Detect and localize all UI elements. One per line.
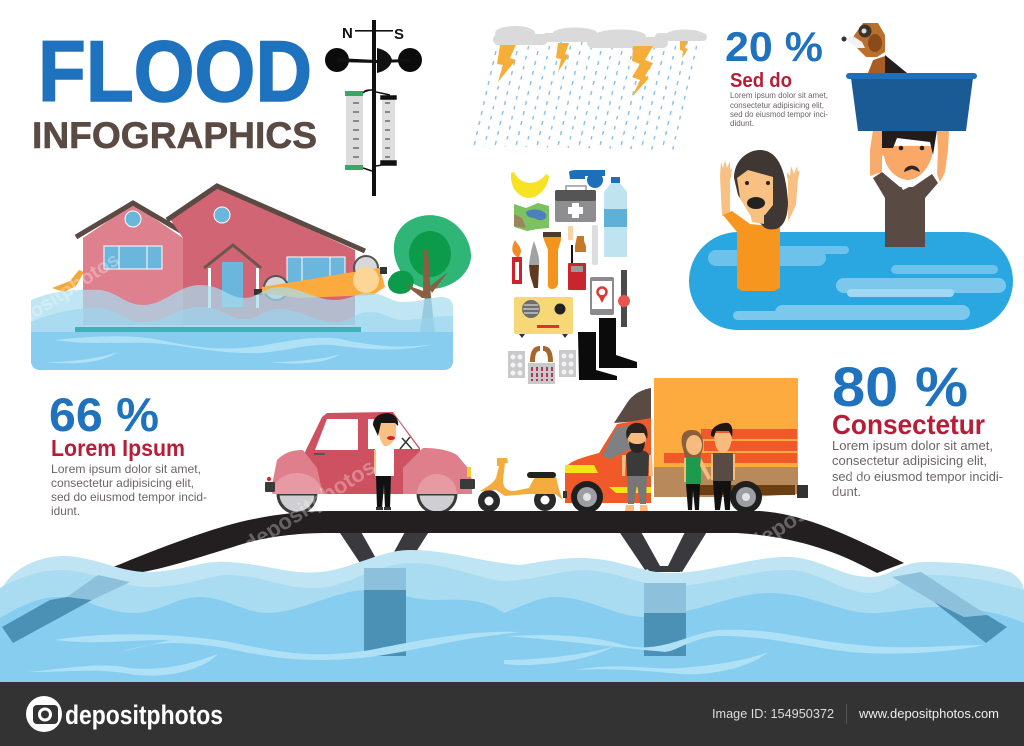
stat: 20 percent: 20 % xyxy=(725,23,823,70)
icon: phone xyxy=(590,277,614,315)
river middle layer xyxy=(0,563,1024,682)
title xyxy=(32,24,317,156)
icon: tree xyxy=(388,215,471,345)
stat: 66 percent: sed do eiusmod tempor incid- xyxy=(51,490,207,504)
logo wordmark: depositphotos xyxy=(65,700,223,730)
stat: 20 percent: sed do eiusmod tempor inci- xyxy=(730,109,828,119)
stat: 80 percent: 80 % xyxy=(832,355,968,418)
icon: pills xyxy=(508,346,576,384)
icon: medicine bottle xyxy=(575,236,586,252)
icon: knife xyxy=(529,241,539,288)
watermark text: depositphotos xyxy=(239,454,380,557)
stat: 20 percent: didunt. xyxy=(730,118,754,128)
icon: weather vane and rain gauge: S xyxy=(394,26,404,43)
title: INFOGRAPHICS xyxy=(32,115,317,156)
icon: walkie talkie xyxy=(568,245,586,290)
stat: 20 percent xyxy=(725,23,828,128)
icon: ampule xyxy=(568,226,573,240)
river lower layer xyxy=(0,590,1024,682)
panel: emergency kit items xyxy=(508,170,637,384)
icon: watch xyxy=(618,270,630,327)
icon: map xyxy=(514,203,549,231)
stat: 80 percent: Consectetur xyxy=(832,409,985,440)
stat: 20 percent: consectetur adipisicing elit, xyxy=(730,100,824,110)
river top layer xyxy=(0,550,1024,682)
icon: left house xyxy=(76,203,191,325)
icon: dog xyxy=(842,23,907,73)
icon: weather vane and rain gauge xyxy=(325,20,422,196)
panel: flooded house xyxy=(31,186,471,370)
stat: 20 percent: Sed do xyxy=(730,70,792,92)
panel: storm cloud and rain xyxy=(466,26,707,150)
stat: 66 percent: idunt. xyxy=(51,504,80,518)
river streaks xyxy=(28,630,985,676)
title: FLOOD xyxy=(38,24,312,120)
footer bar xyxy=(0,682,1024,746)
stat: 80 percent xyxy=(832,355,1003,499)
icon: truck xyxy=(563,378,808,513)
stat: 80 percent: sed do eiusmod tempor incidi- xyxy=(832,469,1003,484)
water: lower layer xyxy=(31,332,453,370)
icon: lighter xyxy=(512,240,522,284)
icon: woman in green xyxy=(682,430,711,510)
icon: camera logo xyxy=(26,696,62,732)
icon: floating car xyxy=(254,256,387,300)
icon: blue tub xyxy=(846,73,977,131)
icon: radio xyxy=(514,297,573,338)
panel: bridge and river xyxy=(0,511,1024,682)
stat: 66 percent: consectetur adipisicing elit, xyxy=(51,476,194,490)
stat: 66 percent: Lorem ipsum dolor sit amet, xyxy=(51,462,201,476)
icon: water bottle xyxy=(604,177,627,257)
stat: 20 percent: Lorem ipsum dolor sit amet, xyxy=(730,90,828,100)
stat: 66 percent xyxy=(49,388,207,518)
icon: weather vane and rain gauge: N xyxy=(342,25,353,42)
icon: flashlight xyxy=(543,232,561,289)
icon: woman in water xyxy=(720,150,800,291)
stat: 80 percent: consectetur adipisicing elit, xyxy=(832,453,987,468)
watermark text: depositphotos xyxy=(744,453,885,556)
icon: man carrying tub xyxy=(870,130,949,247)
stat: 66 percent: Lorem Ipsum xyxy=(51,435,185,461)
water: middle layer xyxy=(31,307,453,370)
icon: clouds xyxy=(493,26,707,48)
icon: submerged small creature xyxy=(52,270,84,292)
image id: Image ID: 154950372 xyxy=(712,707,834,721)
panel: people in flood water xyxy=(689,23,1013,330)
icon: lightning bolts xyxy=(497,41,688,97)
stat: 80 percent: Lorem ipsum dolor sit amet, xyxy=(832,438,993,453)
watermark text xyxy=(0,249,885,557)
submerged bridge upper parts xyxy=(67,568,987,617)
submerged bridge lower parts xyxy=(2,590,1007,656)
icon: man in grey xyxy=(711,423,735,510)
icon: whistle xyxy=(569,170,605,188)
bridge deck xyxy=(113,511,904,573)
water: top translucent layer xyxy=(31,285,453,370)
icon: thermometer xyxy=(592,225,598,265)
icon: scooter xyxy=(478,458,563,512)
icon: right house xyxy=(167,186,365,325)
website: www.depositphotos.com xyxy=(858,707,999,721)
water streaks xyxy=(708,246,1006,320)
icon: banana xyxy=(511,172,549,198)
stat: 80 percent: dunt. xyxy=(832,484,861,499)
icon: man by car xyxy=(373,413,398,510)
water pool xyxy=(689,232,1013,330)
stat: 66 percent: 66 % xyxy=(49,388,159,441)
bridge pier struts xyxy=(338,530,708,572)
icon: red car xyxy=(265,412,475,513)
icon: boots xyxy=(578,318,637,380)
icon: bearded man xyxy=(622,423,653,511)
icon: first aid kit xyxy=(555,186,596,222)
icon: house base strip xyxy=(75,327,361,332)
